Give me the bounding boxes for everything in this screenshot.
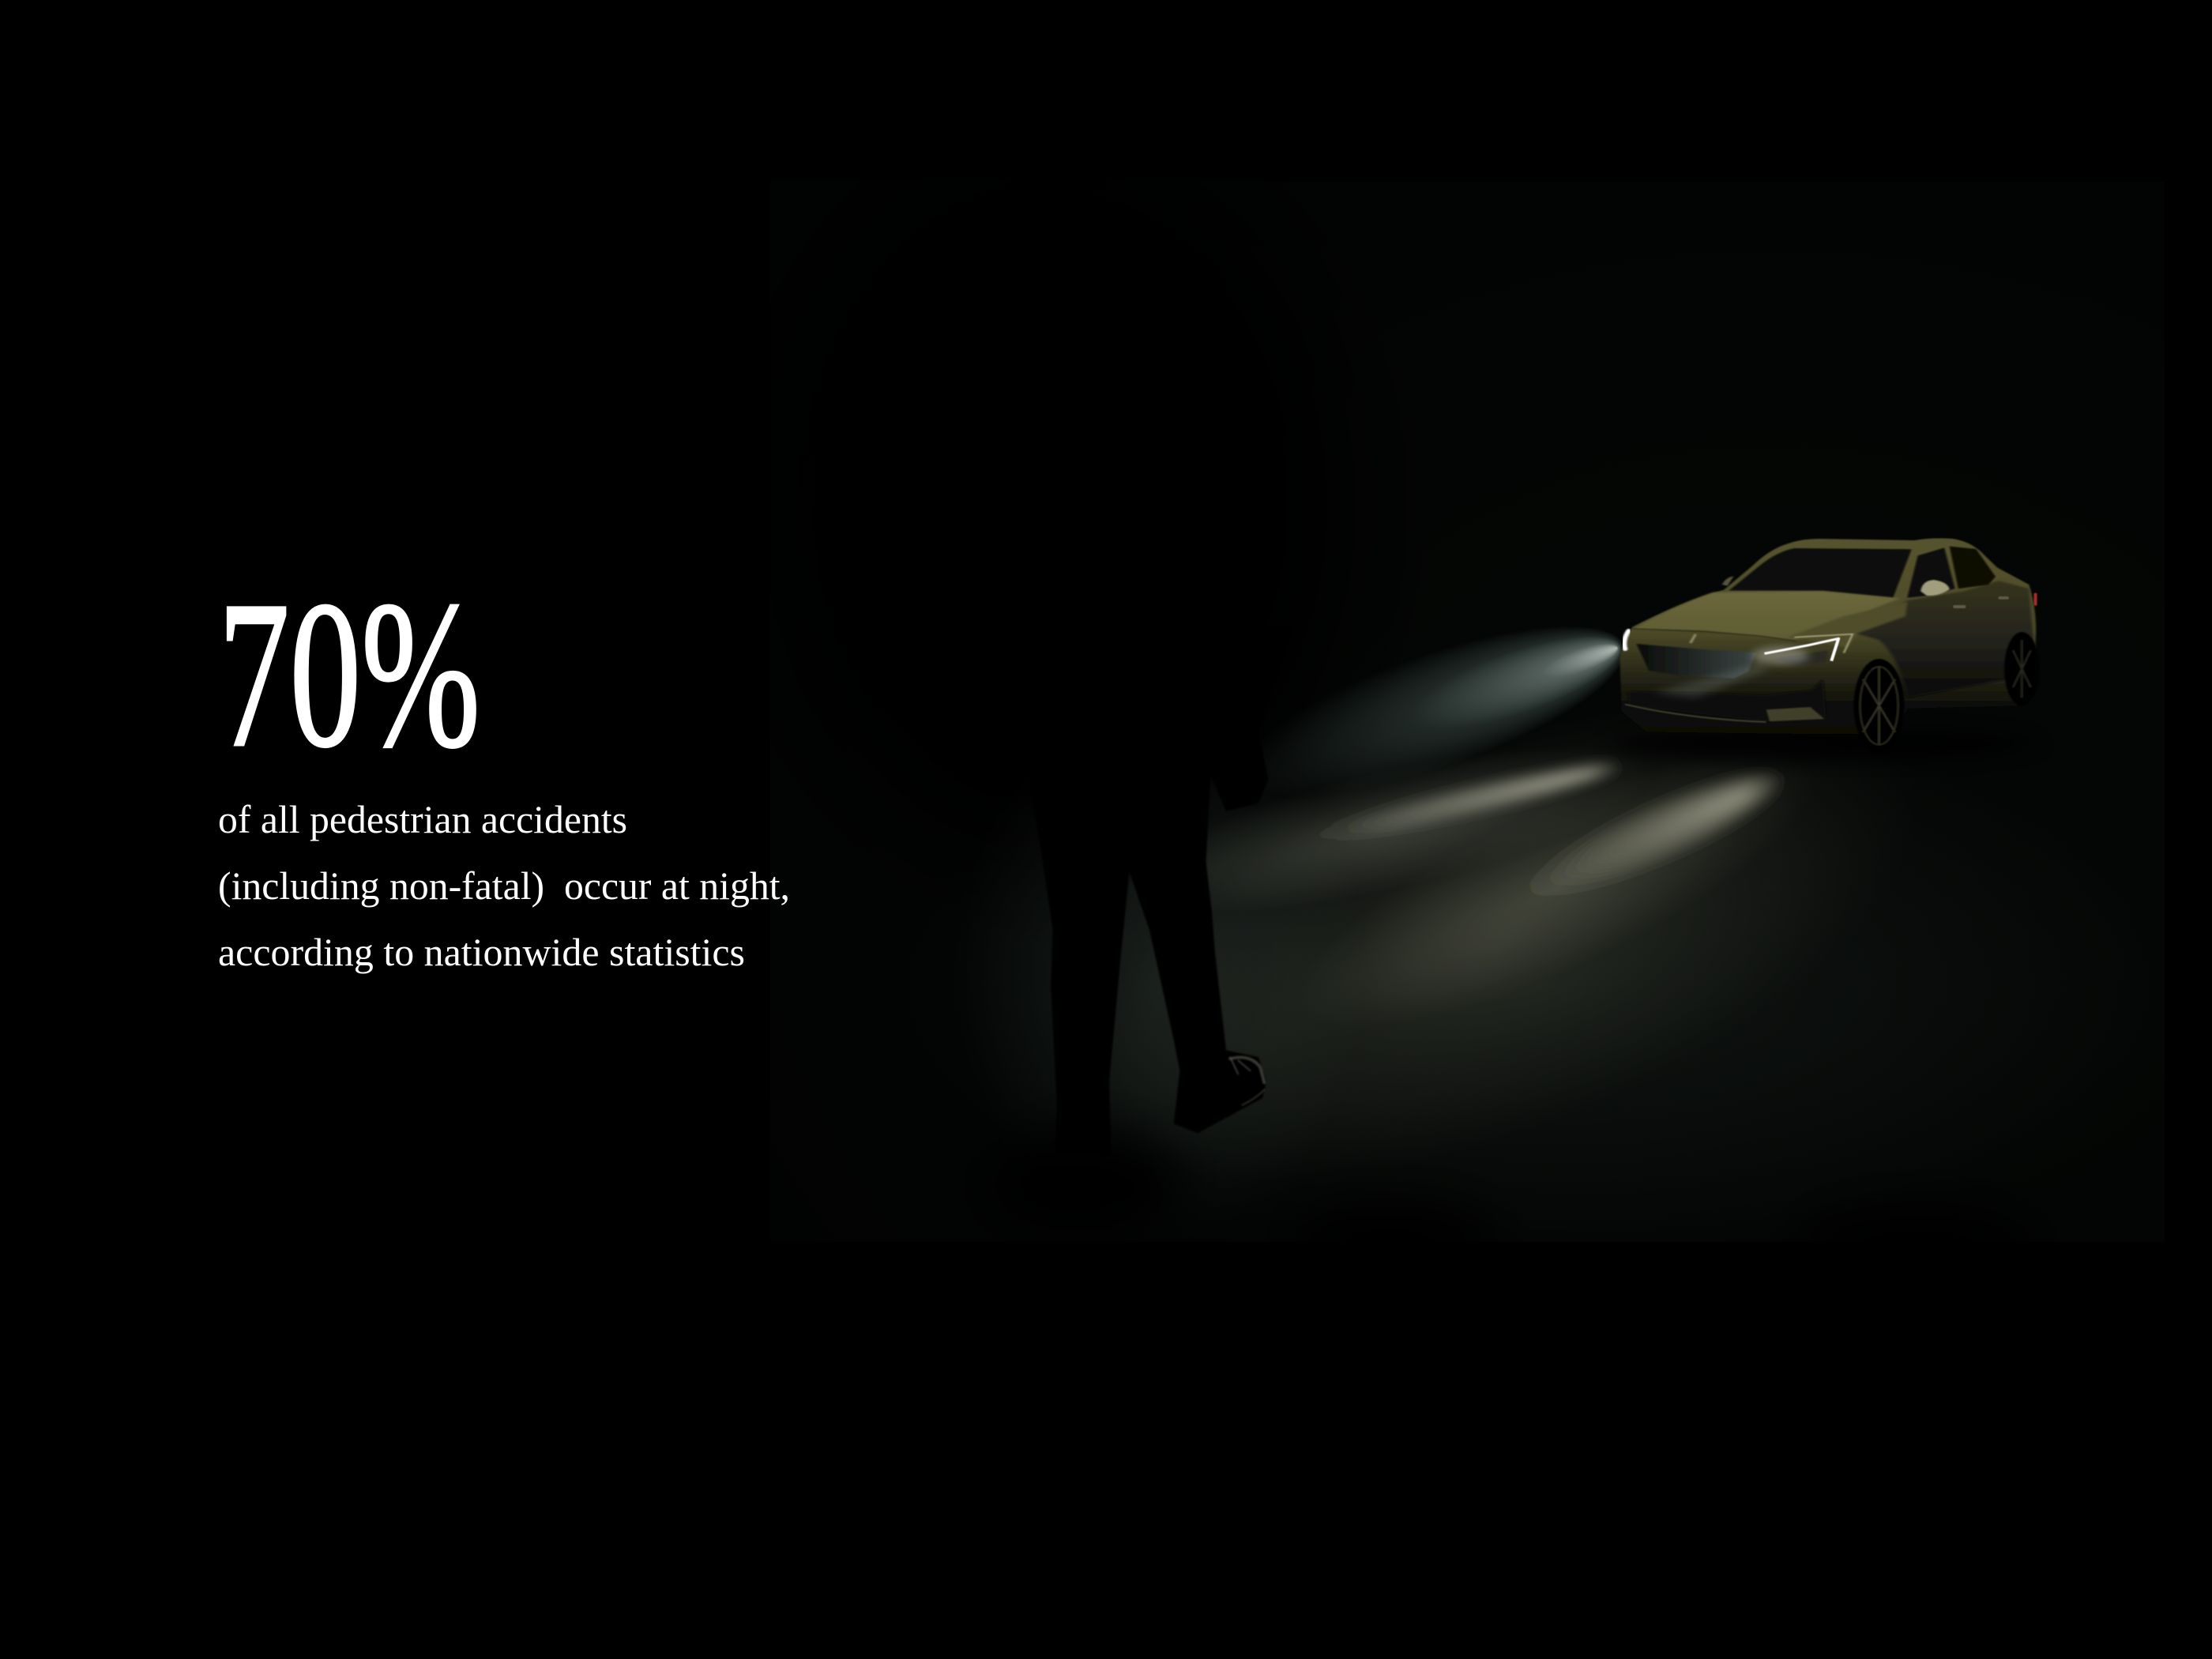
description text: (including non-fatal) occur at night, (218, 863, 790, 908)
right headlight unit (1752, 634, 1853, 666)
side panel (1851, 581, 2034, 698)
pedestrian silhouette (1000, 626, 1295, 1157)
fender highlight (1787, 602, 1907, 648)
badge (1691, 634, 1695, 643)
front wheel (1853, 659, 1905, 753)
hood (1633, 591, 1900, 640)
shoe highlight (1230, 1057, 1265, 1105)
road floor glow (1006, 758, 1866, 1174)
lower bumper (1625, 679, 1826, 722)
description text (218, 797, 790, 974)
description text: of all pedestrian accidents (218, 797, 627, 841)
rear wheel (2004, 632, 2040, 705)
car shadow (1637, 735, 1844, 762)
side windows (1907, 547, 1996, 598)
side mirrors (1722, 576, 1950, 596)
dark body of pedestrian fading into the night (758, 134, 1359, 877)
road light streak one (1206, 754, 1623, 897)
windshield (1729, 548, 1912, 597)
car (1611, 538, 2040, 762)
light wash on bumper (1653, 664, 1770, 698)
grille (1636, 644, 1756, 679)
headlight beam through air (1281, 629, 1623, 781)
hood crease (1633, 629, 1796, 641)
car body (1620, 538, 2036, 743)
description text: according to nationwide statistics (218, 930, 745, 974)
left headlight (1624, 630, 1629, 649)
statistic: 70%: 70% (218, 558, 480, 791)
ambient panel tone (770, 182, 2165, 1242)
road light streak two (1360, 766, 1785, 994)
dark patches at bottom of photo (1060, 1135, 1164, 1199)
photo: pedestrian and car at night (969, 537, 2095, 1217)
tail light (2034, 593, 2037, 606)
door handles (1953, 596, 2009, 608)
